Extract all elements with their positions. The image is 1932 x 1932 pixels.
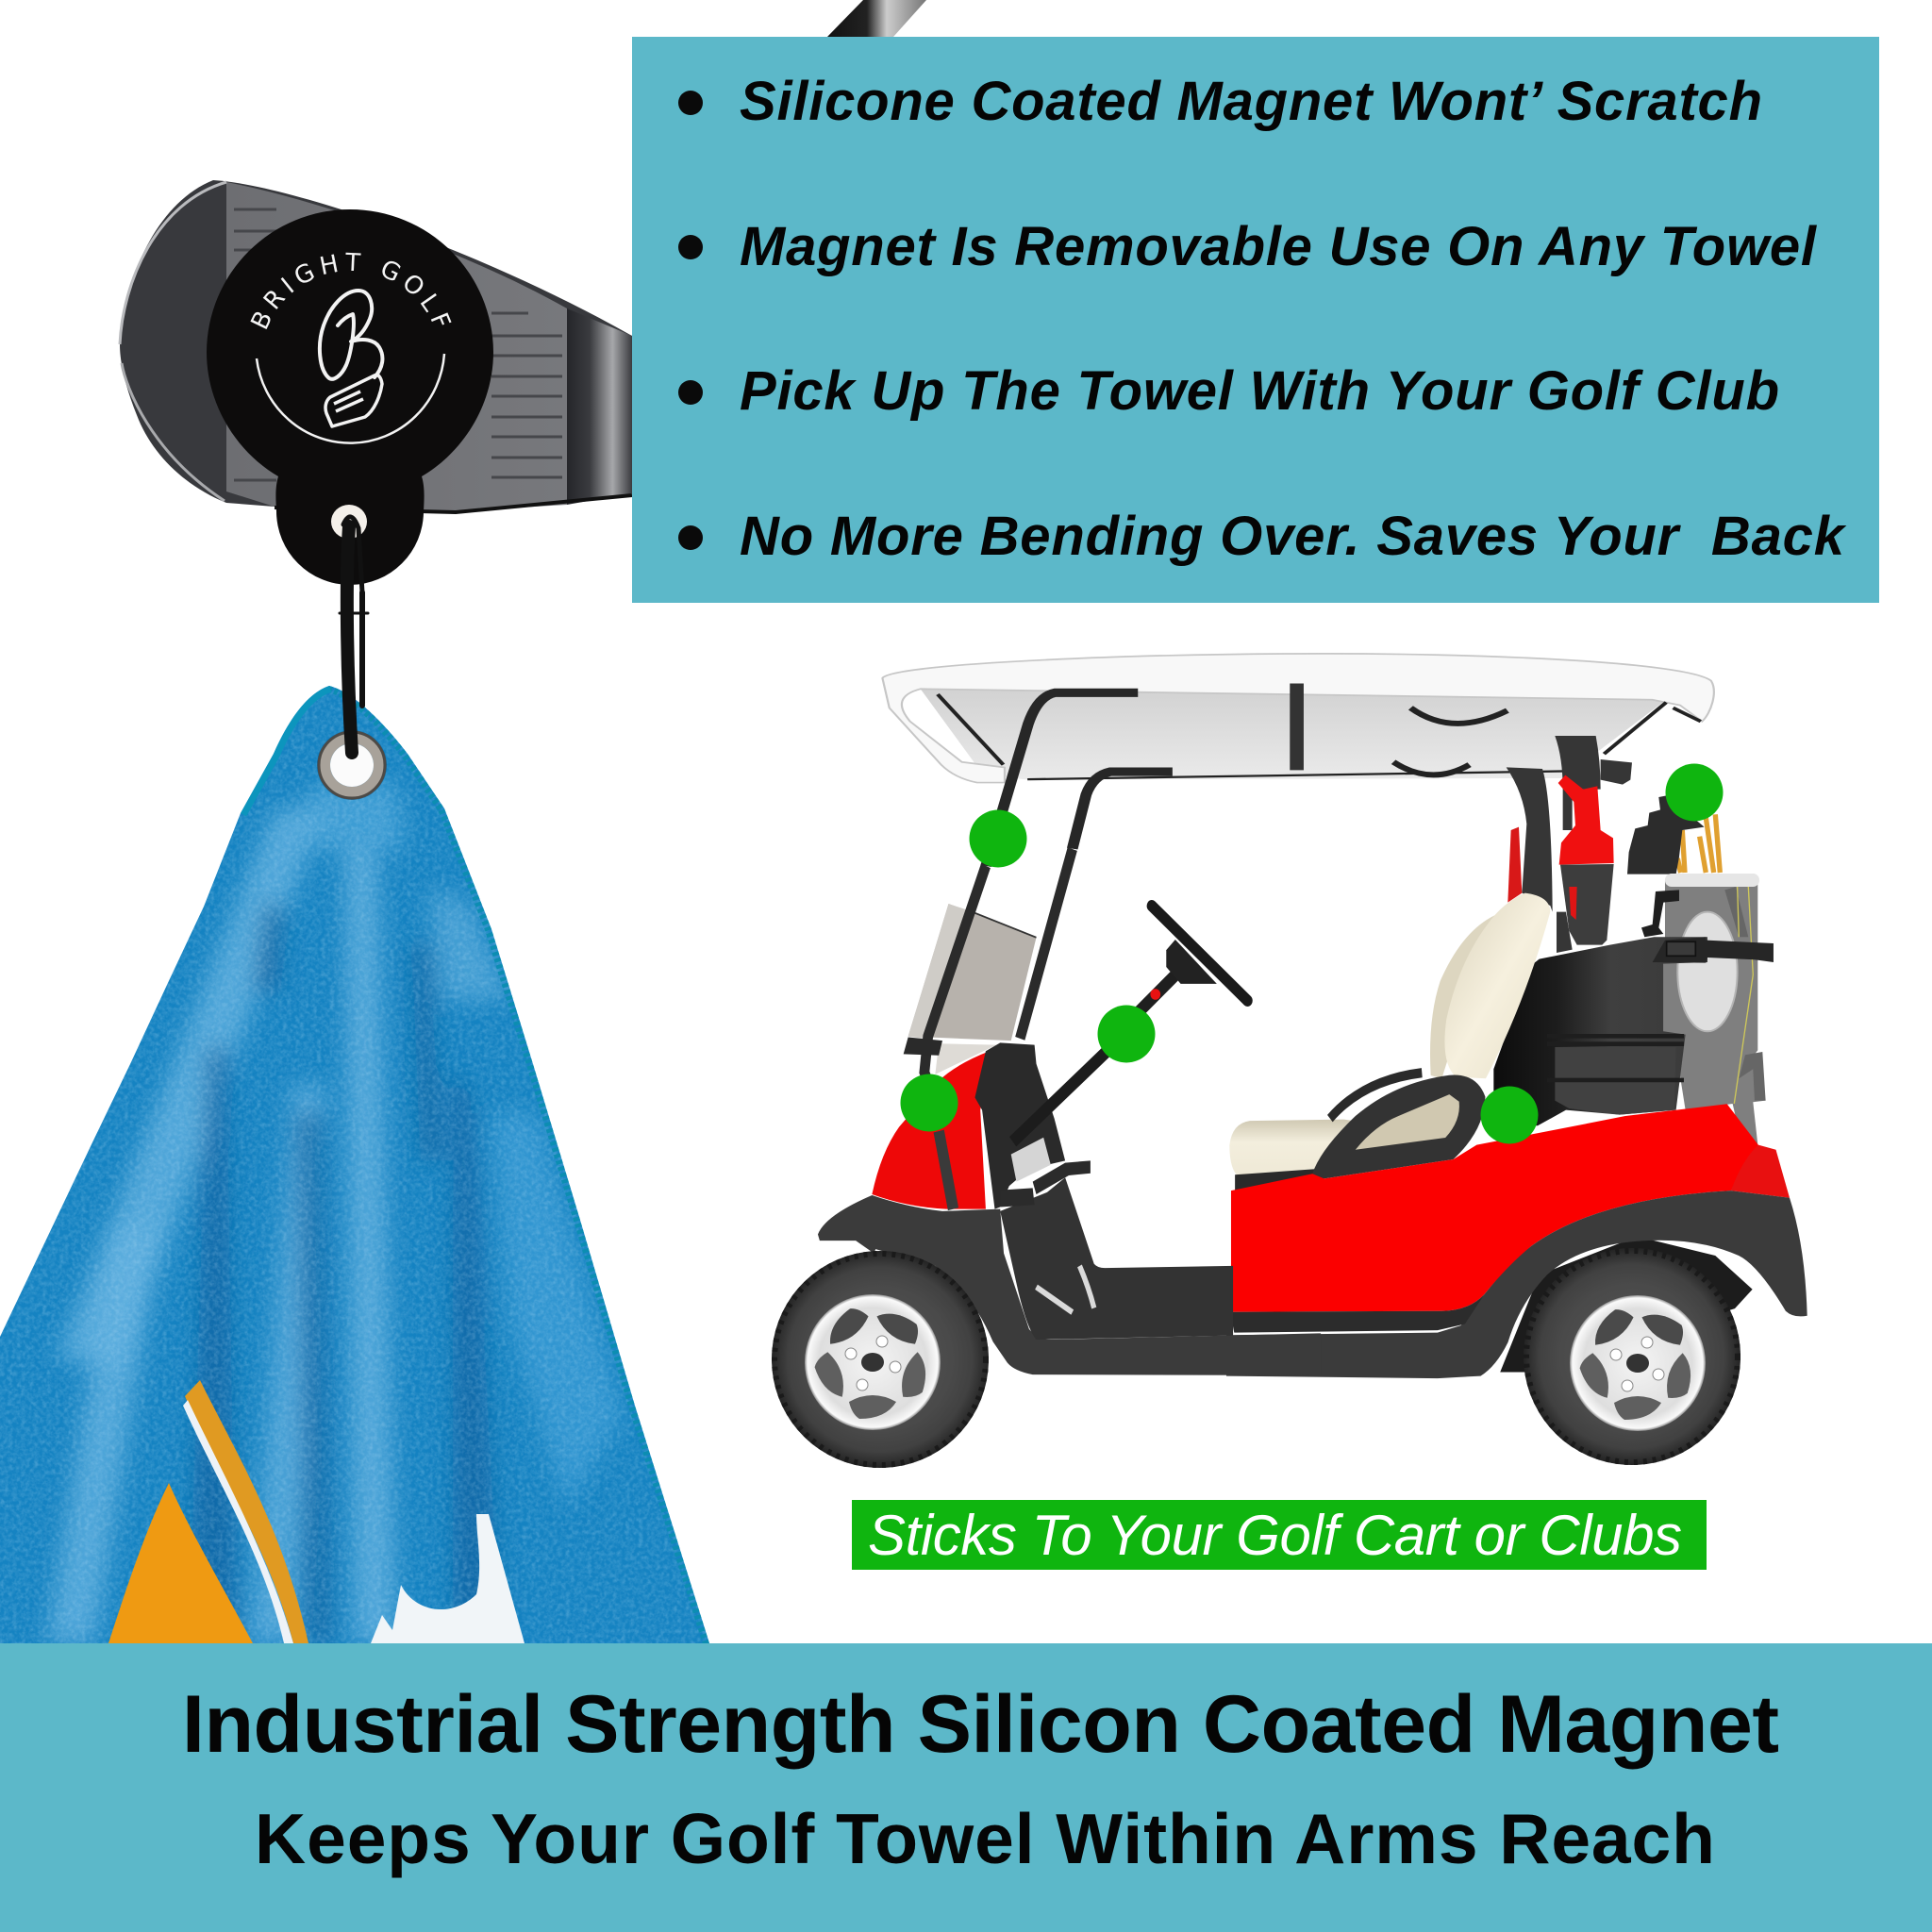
golf cart [772, 654, 1807, 1468]
feature 4: No More Bending Over. Saves Your Back [740, 506, 1847, 567]
magnet spot on lower pillar [900, 1074, 958, 1132]
subheadline: Keeps Your Golf Towel Within Arms Reach [255, 1799, 1715, 1878]
green caption: Sticks To Your Golf Cart or Clubs [868, 1504, 1682, 1567]
water bottle [1507, 775, 1614, 945]
towel white stripe [183, 1400, 293, 1643]
seat cushion [1229, 1120, 1443, 1176]
rear fender and sill [1226, 1191, 1807, 1378]
front fender and lower body [818, 1195, 1321, 1375]
magnet disc with logo [207, 209, 493, 585]
magnet disc with logo: BRIGHT GOLF [251, 253, 451, 329]
front arm rest [1312, 1074, 1485, 1179]
magnet attachment spots [900, 764, 1723, 1143]
magnet spot on arm rest [1481, 1087, 1538, 1143]
windshield clamp [904, 1038, 942, 1056]
golf bag [1627, 795, 1766, 1144]
cup holder [1000, 1160, 1091, 1207]
logo arc [257, 354, 444, 443]
disc eyelet hole [331, 505, 367, 539]
seat base shadow [1235, 1169, 1316, 1191]
under red strip [1230, 1294, 1485, 1333]
golf club shaft [827, 0, 926, 37]
under rear shadow [1500, 1237, 1753, 1372]
upper steering column [1138, 974, 1177, 1013]
magnet spot on golf clubs [1666, 764, 1723, 821]
rear cargo box [1493, 937, 1707, 1125]
feature 2: Magnet Is Removable Use On Any Towel [740, 216, 1818, 277]
rear roof struts [1507, 736, 1632, 953]
front windshield pillars [924, 849, 1073, 1102]
front wheel [772, 1251, 989, 1468]
carabiner [340, 517, 368, 753]
cart rear upper section [1430, 736, 1774, 1144]
brand name [261, 271, 441, 360]
towel soft folds [47, 783, 623, 1643]
headline: Industrial Strength Silicon Coated Magnet [182, 1679, 1779, 1770]
bottom banner [0, 1643, 1932, 1932]
towel white print [371, 1514, 525, 1643]
logo B monogram [320, 291, 382, 379]
dash column [974, 1042, 1065, 1209]
steering wheel [1152, 906, 1247, 1001]
control panel [1011, 1138, 1051, 1182]
pedals [1037, 1266, 1094, 1312]
towel orange stripe [185, 1380, 308, 1643]
magnet spot on steering column [1098, 1006, 1155, 1062]
magnet spot on front pillar [970, 809, 1026, 868]
cart roof [882, 654, 1714, 866]
bag strap [1653, 937, 1774, 963]
storage box [1547, 1036, 1684, 1115]
feature 3: Pick Up The Towel With Your Golf Club [740, 360, 1779, 422]
back arm rest [1330, 1073, 1422, 1119]
lower pillar [939, 1131, 953, 1209]
features panel [632, 37, 1879, 603]
towel grommet [317, 730, 387, 800]
towel orange print [108, 1483, 253, 1643]
column red button [1150, 989, 1160, 1000]
feature 1: Silicone Coated Magnet Wont’ Scratch [740, 71, 1762, 132]
rear wheel [1524, 1248, 1740, 1465]
red tail [1731, 1145, 1790, 1198]
golf club head [120, 180, 632, 512]
steering column [1013, 1042, 1116, 1141]
windshield [908, 904, 1037, 1074]
cart front section [818, 849, 1321, 1375]
floor and kick panel [1000, 1177, 1233, 1340]
wheel hub [1166, 940, 1217, 984]
cart rear lower section [1226, 1073, 1807, 1378]
seat back [1430, 893, 1550, 1078]
red front cowl [872, 1051, 990, 1209]
logo club icon [325, 375, 382, 426]
towel [0, 679, 726, 1651]
red rear body [1231, 1104, 1758, 1312]
